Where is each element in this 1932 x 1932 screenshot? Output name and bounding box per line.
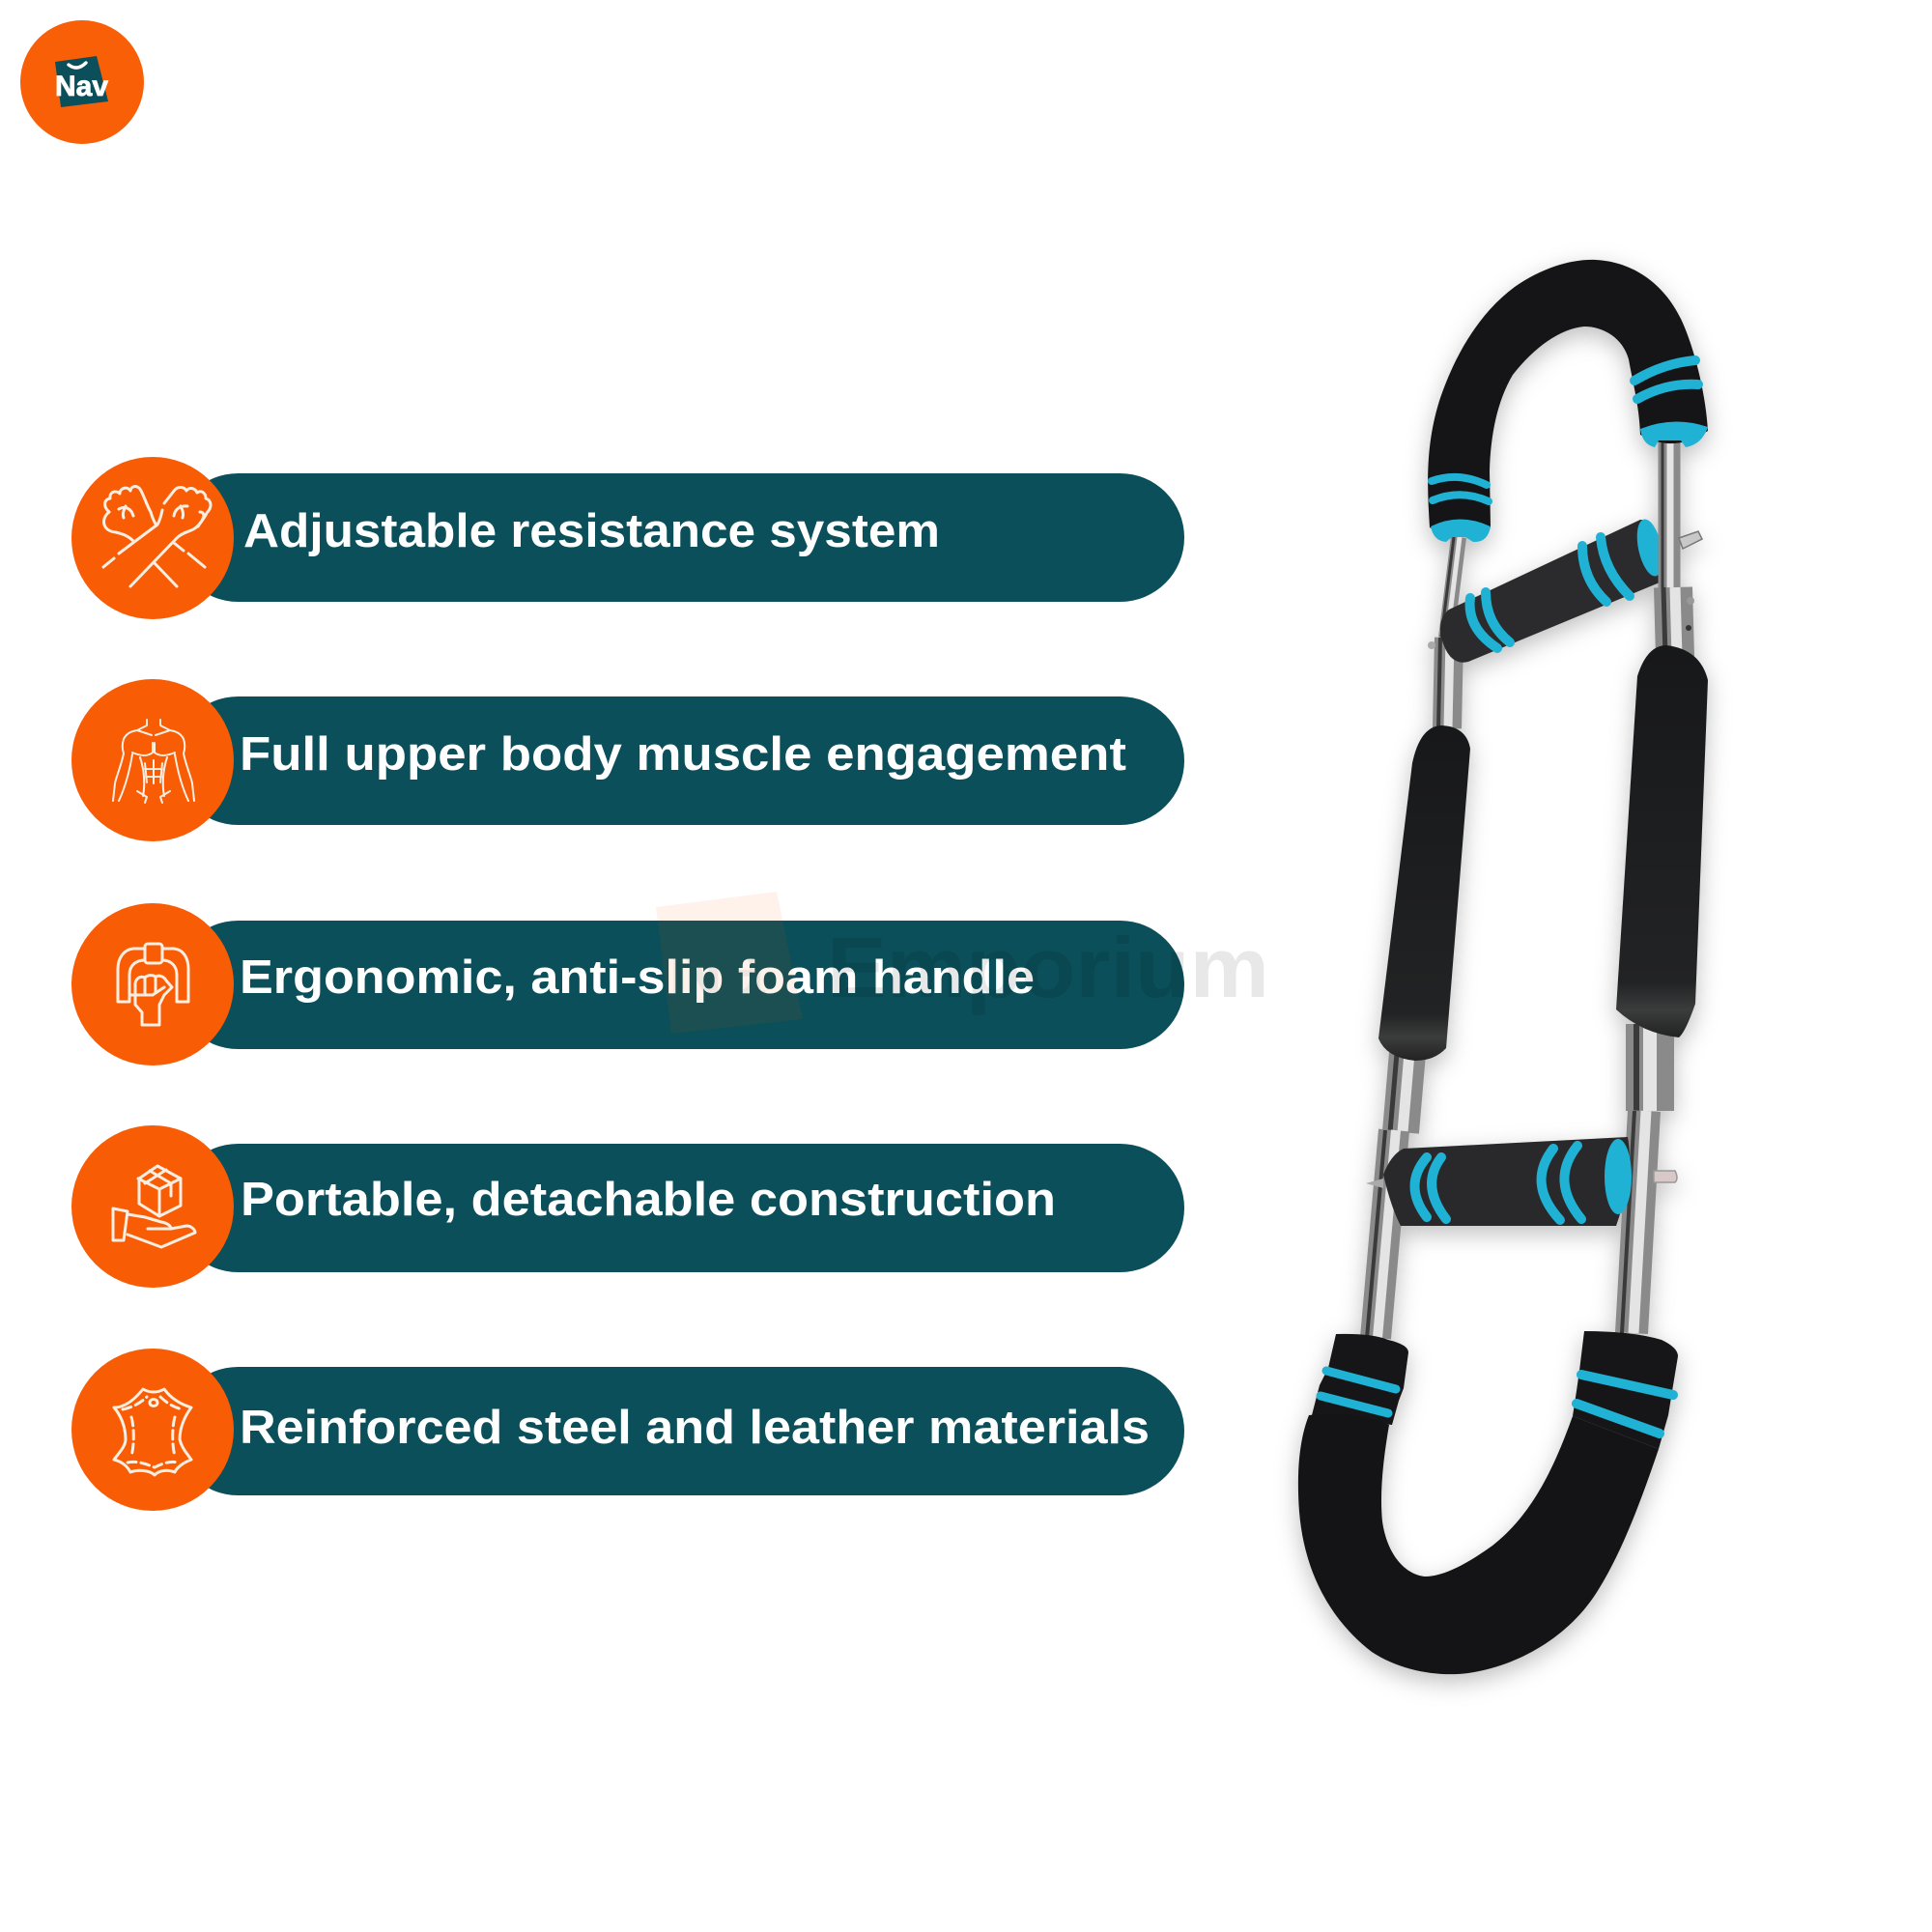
product: arm exerciser: [1298, 260, 1708, 1674]
bottom left collar: [1312, 1334, 1408, 1425]
left long grip: [1378, 725, 1470, 1061]
feature row: reinforced materials: [71, 1349, 1184, 1511]
upper left rod: [1438, 537, 1460, 728]
feature row: full upper body: [71, 679, 1184, 841]
feature text: Reinforced steel and leather materials: [240, 1402, 1150, 1454]
feature text: Full upper body muscle engagement: [240, 728, 1126, 781]
top handle cyan rings: [1432, 360, 1698, 501]
icon: hand gripping handle: [118, 944, 188, 1025]
feature text: Portable, detachable construction: [241, 1174, 1056, 1226]
icon: crossed fists: [103, 487, 211, 586]
feature row: adjustable resistance: [71, 457, 1184, 619]
logo bag: [55, 56, 108, 107]
lower right rod: [1622, 1024, 1650, 1333]
bottom curved foam handle: [1298, 1414, 1659, 1674]
lower handle: [1383, 1137, 1632, 1226]
upper right rod: [1662, 440, 1677, 657]
icon: box on hand: [113, 1166, 195, 1247]
top handle cyan end caps: [1431, 421, 1708, 542]
feature row: portable construction: [71, 1125, 1184, 1288]
lower left rod: [1367, 1053, 1409, 1338]
watermark: [656, 892, 1269, 1034]
logo smile: [69, 63, 86, 68]
logo wordmark: Nav: [55, 71, 108, 102]
upper pins: [1428, 531, 1702, 649]
feature row: ergonomic handle: [71, 903, 1184, 1065]
right long grip: [1616, 645, 1708, 1037]
icon: leather hide: [114, 1389, 191, 1475]
watermark: Na: [668, 920, 766, 1015]
upper handle: [1440, 517, 1667, 663]
feature text: Adjustable resistance system: [243, 505, 940, 557]
top curved foam handle: [1428, 260, 1708, 537]
logo badge: [20, 20, 144, 144]
bottom right collar: [1573, 1331, 1678, 1449]
feature text: Ergonomic, anti-slip foam handle: [240, 952, 1035, 1004]
icon: torso: [113, 720, 194, 803]
watermark: Emporium: [827, 920, 1269, 1015]
lower pins: [1366, 1171, 1677, 1188]
